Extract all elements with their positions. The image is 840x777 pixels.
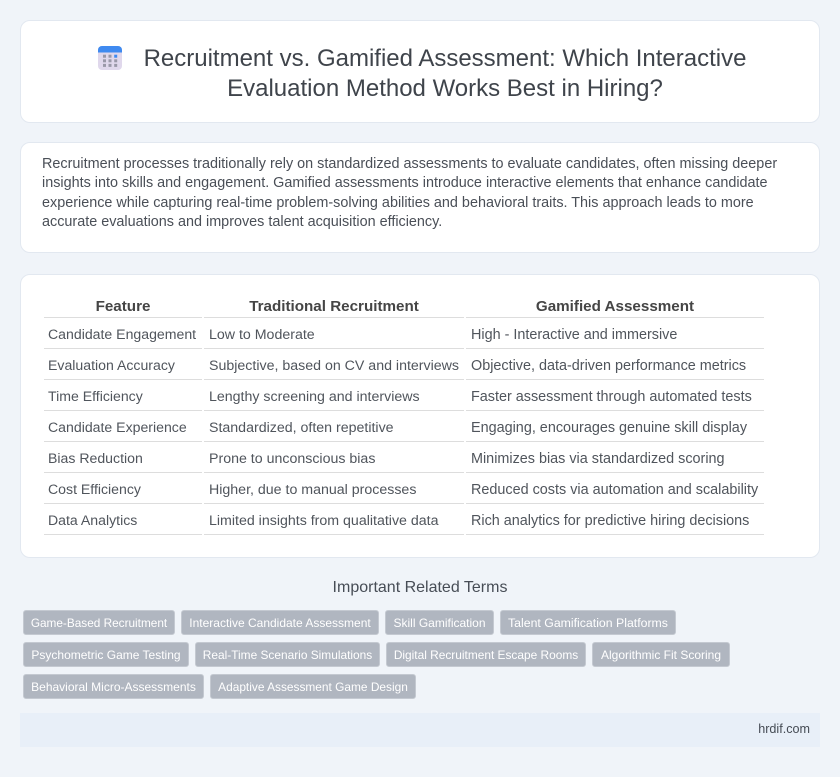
table header bbox=[44, 298, 764, 318]
intro text: accurate evaluations and improves talent acquisition efficiency. bbox=[42, 214, 442, 230]
related term tags: Behavioral Micro-Assessments bbox=[31, 680, 196, 694]
row: cost efficiency: Reduced costs via automation and scalability bbox=[471, 482, 758, 498]
row: evaluation accuracy: Evaluation Accuracy bbox=[48, 357, 175, 373]
row: candidate experience: Engaging, encourages genuine skill display bbox=[471, 420, 747, 436]
row: time efficiency: Faster assessment through automated tests bbox=[471, 389, 752, 405]
table header: Traditional Recruitment bbox=[249, 298, 419, 315]
header panel bbox=[20, 20, 820, 123]
related term tags: Interactive Candidate Assessment bbox=[189, 616, 371, 630]
intro text: Recruitment processes traditionally rely on standardized assessments to evaluate candidates, often missing deeper bbox=[42, 156, 777, 172]
title bbox=[144, 45, 746, 102]
row: data analytics: Limited insights from qualitative data bbox=[209, 513, 438, 529]
row: candidate engagement: Candidate Engagement bbox=[48, 326, 196, 342]
row: bias reduction: Prone to unconscious bias bbox=[209, 451, 375, 467]
row: time efficiency: Time Efficiency bbox=[48, 388, 143, 404]
related term tags: Psychometric Game Testing bbox=[31, 648, 181, 662]
row: candidate engagement bbox=[44, 326, 764, 349]
row: evaluation accuracy: Subjective, based on CV and interviews bbox=[209, 358, 459, 374]
row: data analytics: Data Analytics bbox=[48, 512, 137, 528]
related terms heading: Important Related Terms bbox=[333, 579, 507, 596]
row: time efficiency: Lengthy screening and interviews bbox=[209, 389, 420, 405]
row: candidate engagement: High - Interactive and immersive bbox=[471, 327, 677, 343]
footer source: hrdif.com bbox=[758, 722, 810, 736]
row: bias reduction: Bias Reduction bbox=[48, 450, 143, 466]
related term tags: Digital Recruitment Escape Rooms bbox=[394, 648, 578, 662]
related term tags: Talent Gamification Platforms bbox=[508, 616, 668, 630]
row: cost efficiency bbox=[44, 481, 764, 504]
row: candidate engagement: Low to Moderate bbox=[209, 327, 315, 343]
panel: comparison table bbox=[20, 274, 820, 558]
intro panel bbox=[20, 142, 820, 253]
row: candidate experience: Standardized, often repetitive bbox=[209, 420, 394, 436]
title: Recruitment vs. Gamified Assessment: Which Interactive bbox=[144, 45, 746, 72]
intro text: experience while capturing real-time problem-solving abilities and behavioral traits. This approach leads to more bbox=[42, 195, 754, 211]
row: data analytics bbox=[44, 512, 764, 535]
row: evaluation accuracy bbox=[44, 357, 764, 380]
related term tags: Algorithmic Fit Scoring bbox=[601, 648, 721, 662]
table header: Feature bbox=[96, 298, 150, 315]
related term tags: Skill Gamification bbox=[393, 616, 486, 630]
related term tags: Real-Time Scenario Simulations bbox=[203, 648, 372, 662]
row: candidate experience: Candidate Experience bbox=[48, 419, 187, 435]
row: evaluation accuracy: Objective, data-driven performance metrics bbox=[471, 358, 746, 374]
table header: Gamified Assessment bbox=[536, 298, 694, 315]
row: bias reduction: Minimizes bias via standardized scoring bbox=[471, 451, 725, 467]
title: Evaluation Method Works Best in Hiring? bbox=[227, 75, 663, 102]
related term tags bbox=[23, 610, 730, 699]
comparison table bbox=[44, 298, 764, 535]
intro text: insights into skills and engagement. Gamified assessments introduce interactive elements that enhance candidate bbox=[42, 175, 768, 191]
row: cost efficiency: Higher, due to manual processes bbox=[209, 482, 416, 498]
row: bias reduction bbox=[44, 450, 764, 473]
row: time efficiency bbox=[44, 388, 764, 411]
intro text bbox=[42, 156, 777, 230]
row: data analytics: Rich analytics for predictive hiring decisions bbox=[471, 513, 749, 529]
related term tags: Game-Based Recruitment bbox=[31, 616, 167, 630]
icon: calendar bbox=[98, 46, 122, 70]
footer bbox=[20, 713, 820, 747]
row: cost efficiency: Cost Efficiency bbox=[48, 481, 141, 497]
row: candidate experience bbox=[44, 419, 764, 442]
related term tags: Adaptive Assessment Game Design bbox=[218, 680, 408, 694]
